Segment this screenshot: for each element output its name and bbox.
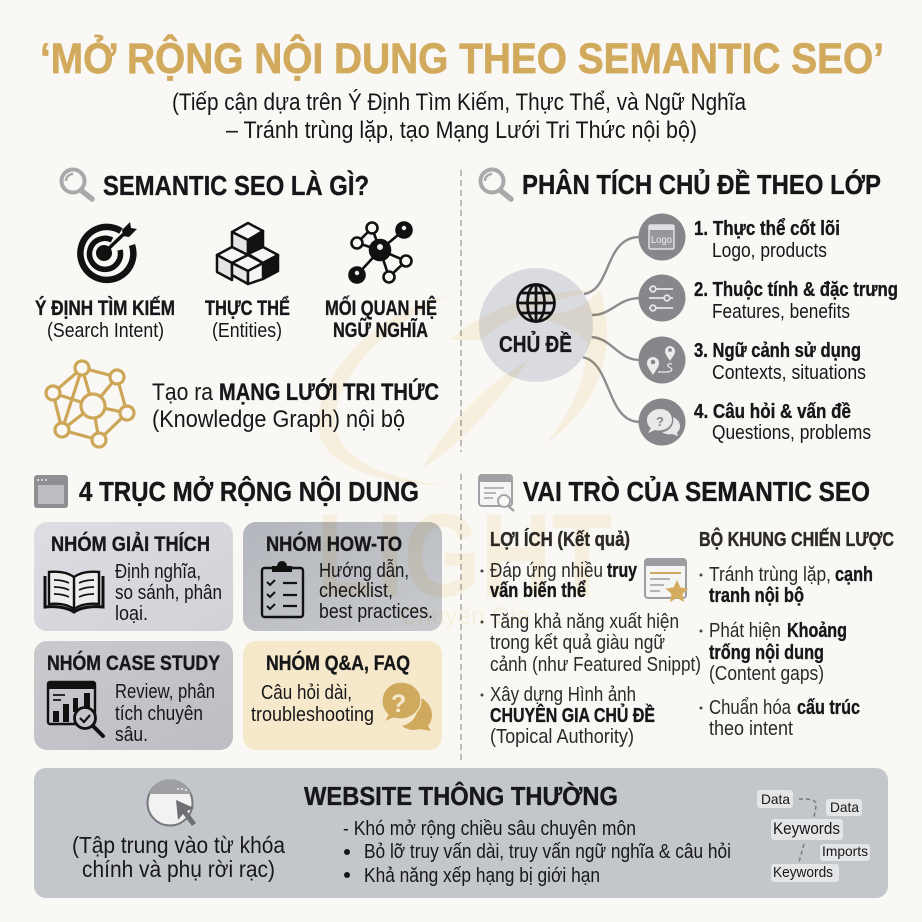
icon: clipboard [262,561,303,617]
watermark logo [316,290,612,630]
heading: role: VAI TRÒ CỦA SEMANTIC SEO [523,475,870,507]
heading: four axes: 4 TRỤC MỞ RỘNG NỘI DUNG [79,475,419,507]
column: benefits: (Topical Authority) [490,726,634,748]
label: semantic relations: NGỮ NGHĨA [333,318,428,342]
label: entities: (Entities) [212,319,282,342]
subtitle: – Tránh trùng lặp, tạo Mạng Lưới Tri Thức nội bộ) [226,117,697,144]
panel: topic analysis [479,168,898,446]
icon: logo window [638,214,686,260]
label: semantic relations: MỐI QUAN HỆ [325,296,437,320]
column: benefits: vấn biến thể [490,580,586,602]
icon: sliders [638,274,686,322]
text: knowledge graph: MẠNG LƯỚI TRI THỨC [219,378,439,406]
diagram: scattered keywords: Data [761,791,790,807]
list: limitations: Khả năng xếp hạng bị giới hạn [364,865,600,887]
label: search intent: Ý ĐỊNH TÌM KIẾM [35,296,175,320]
card: explanation: NHÓM GIẢI THÍCH [51,532,210,556]
list: limitations [343,818,731,887]
layer 2 text [694,278,898,323]
column: benefits: trong kết quả giàu ngữ [490,632,665,654]
diagram: scattered keywords: Imports [822,843,868,859]
list: limitations: - Khó mở rộng chiều sâu chuyên môn [343,818,636,840]
central topic circle: CHỦ ĐỀ [499,329,572,357]
icon: target [80,222,137,280]
column: strategy framework: trống nội dung [709,642,824,664]
column: benefits: Xây dựng Hình ảnh [490,684,636,706]
column: benefits: CHUYÊN GIA CHỦ ĐỀ [490,703,655,727]
list: limitations: Bỏ lỡ truy vấn dài, truy vấn ngữ nghĩa & câu hỏi [364,841,731,863]
column: strategy framework [699,527,894,740]
icon: search [62,170,92,199]
column: benefits [480,528,701,748]
card: explanation [34,522,233,631]
icon: browser window [34,475,68,508]
column: strategy framework: cấu trúc [797,697,860,719]
panel: semantic seo definition [35,170,439,447]
card: q&a: Câu hỏi dài, [261,682,352,704]
connectors [582,237,640,422]
card: case study: NHÓM CASE STUDY [47,651,220,675]
card: how-to: checklist, [319,580,393,602]
panel: role of semantic seo [479,475,894,748]
panel: four axes [34,475,442,750]
text: focus on keywords: (Tập trung vào từ khóa [72,832,285,858]
card: case study: Review, phân [115,681,215,703]
heading: semantic seo: SEMANTIC SEO LÀ GÌ? [103,170,369,201]
card: q&a: troubleshooting [251,704,374,726]
text: focus on keywords: chính và phụ rời rạc) [82,856,275,882]
icon: logo window: Logo [651,234,672,246]
label: semantic relations [325,296,437,342]
column: benefits: Đáp ứng nhiều [490,560,603,582]
card: how-to: NHÓM HOW-TO [266,532,402,556]
icon: document search [479,475,514,511]
diagram: scattered keywords [757,790,870,882]
icon: document star [645,559,688,602]
watermark logo: Chuyên Gia [400,603,531,630]
icon: browser cursor [148,780,196,826]
icon: gold question bubbles [382,682,432,731]
subtitle: (Tiếp cận dựa trên Ý Định Tìm Kiếm, Thực Thể, và Ngữ Nghĩa [172,89,746,116]
column: strategy framework: Khoảng [787,620,847,642]
layer 3 text [694,339,866,384]
layer 4 text [694,400,871,444]
card: how-to: best practices. [319,601,433,623]
text: focus on keywords [72,832,285,882]
text: knowledge graph [152,378,439,433]
card: explanation: loại. [115,603,148,625]
column: strategy framework: cạnh [835,564,873,586]
column: strategy framework: Tránh trùng lặp, [709,564,831,586]
icon: semantic network [350,222,412,282]
icon: book [45,572,103,612]
column: benefits: LỢI ÍCH (Kết quả) [490,528,630,551]
central topic circle [479,268,593,382]
icon: map pins [638,336,686,384]
column: strategy framework: Phát hiện [709,620,781,642]
card: explanation: so sánh, phân [115,582,222,604]
layer 1 text [694,217,840,262]
text: knowledge graph: Tạo ra [152,379,213,406]
icon: search [480,170,511,199]
panel: ordinary website [34,768,888,898]
card: how-to [243,522,442,631]
icon: gold question bubbles: ? [391,690,406,718]
icon: globe [518,284,555,322]
diagram: scattered keywords: Data [830,799,859,815]
diagram: scattered keywords: Keywords [773,819,840,838]
column: benefits: truy [607,560,638,582]
label: search intent [35,296,175,342]
layer 1 text: Logo, products [712,240,827,262]
column: strategy framework: Chuẩn hóa [709,697,792,719]
column: strategy framework: (Content gaps) [709,663,824,685]
watermark logo: LIGHT [316,490,612,622]
icon: question bubbles: ? [656,414,664,429]
label: search intent: (Search Intent) [47,319,164,342]
icon: knowledge graph [46,361,134,447]
column: benefits: Tăng khả năng xuất hiện [490,611,679,633]
card: q&a [243,641,442,750]
column: benefits: cảnh (như Featured Snippt) [490,654,701,676]
column: strategy framework: tranh nội bộ [709,585,804,607]
layer 3 text: Contexts, situations [712,362,866,384]
card: case study: sâu. [115,724,148,746]
icon: cubes [217,223,278,284]
card: case study: tích chuyên [115,703,203,725]
heading: ordinary website: WEBSITE THÔNG THƯỜNG [304,781,618,811]
icon: chart report [48,682,103,736]
icon: question bubbles [638,398,686,446]
diagram: scattered keywords: Keywords [773,864,833,881]
subtitle [172,89,746,144]
layer 4 text: Questions, problems [712,422,871,444]
layer 4 text: 4. Câu hỏi & vấn đề [694,400,851,423]
card: explanation: Định nghĩa, [115,561,201,583]
layer 3 text: 3. Ngữ cảnh sử dụng [694,339,861,362]
card: how-to: Hướng dẫn, [319,559,409,582]
label: entities [205,297,290,342]
layer 2 text: Features, benefits [712,301,850,323]
label: entities: THỰC THỂ [205,297,290,320]
card: case study [34,641,233,750]
card: q&a: NHÓM Q&A, FAQ [266,651,410,675]
layer 1 text: 1. Thực thể cốt lõi [694,217,840,240]
column: strategy framework: theo intent [709,718,793,740]
text: knowledge graph: (Knowledge Graph) nội bộ [152,406,405,433]
